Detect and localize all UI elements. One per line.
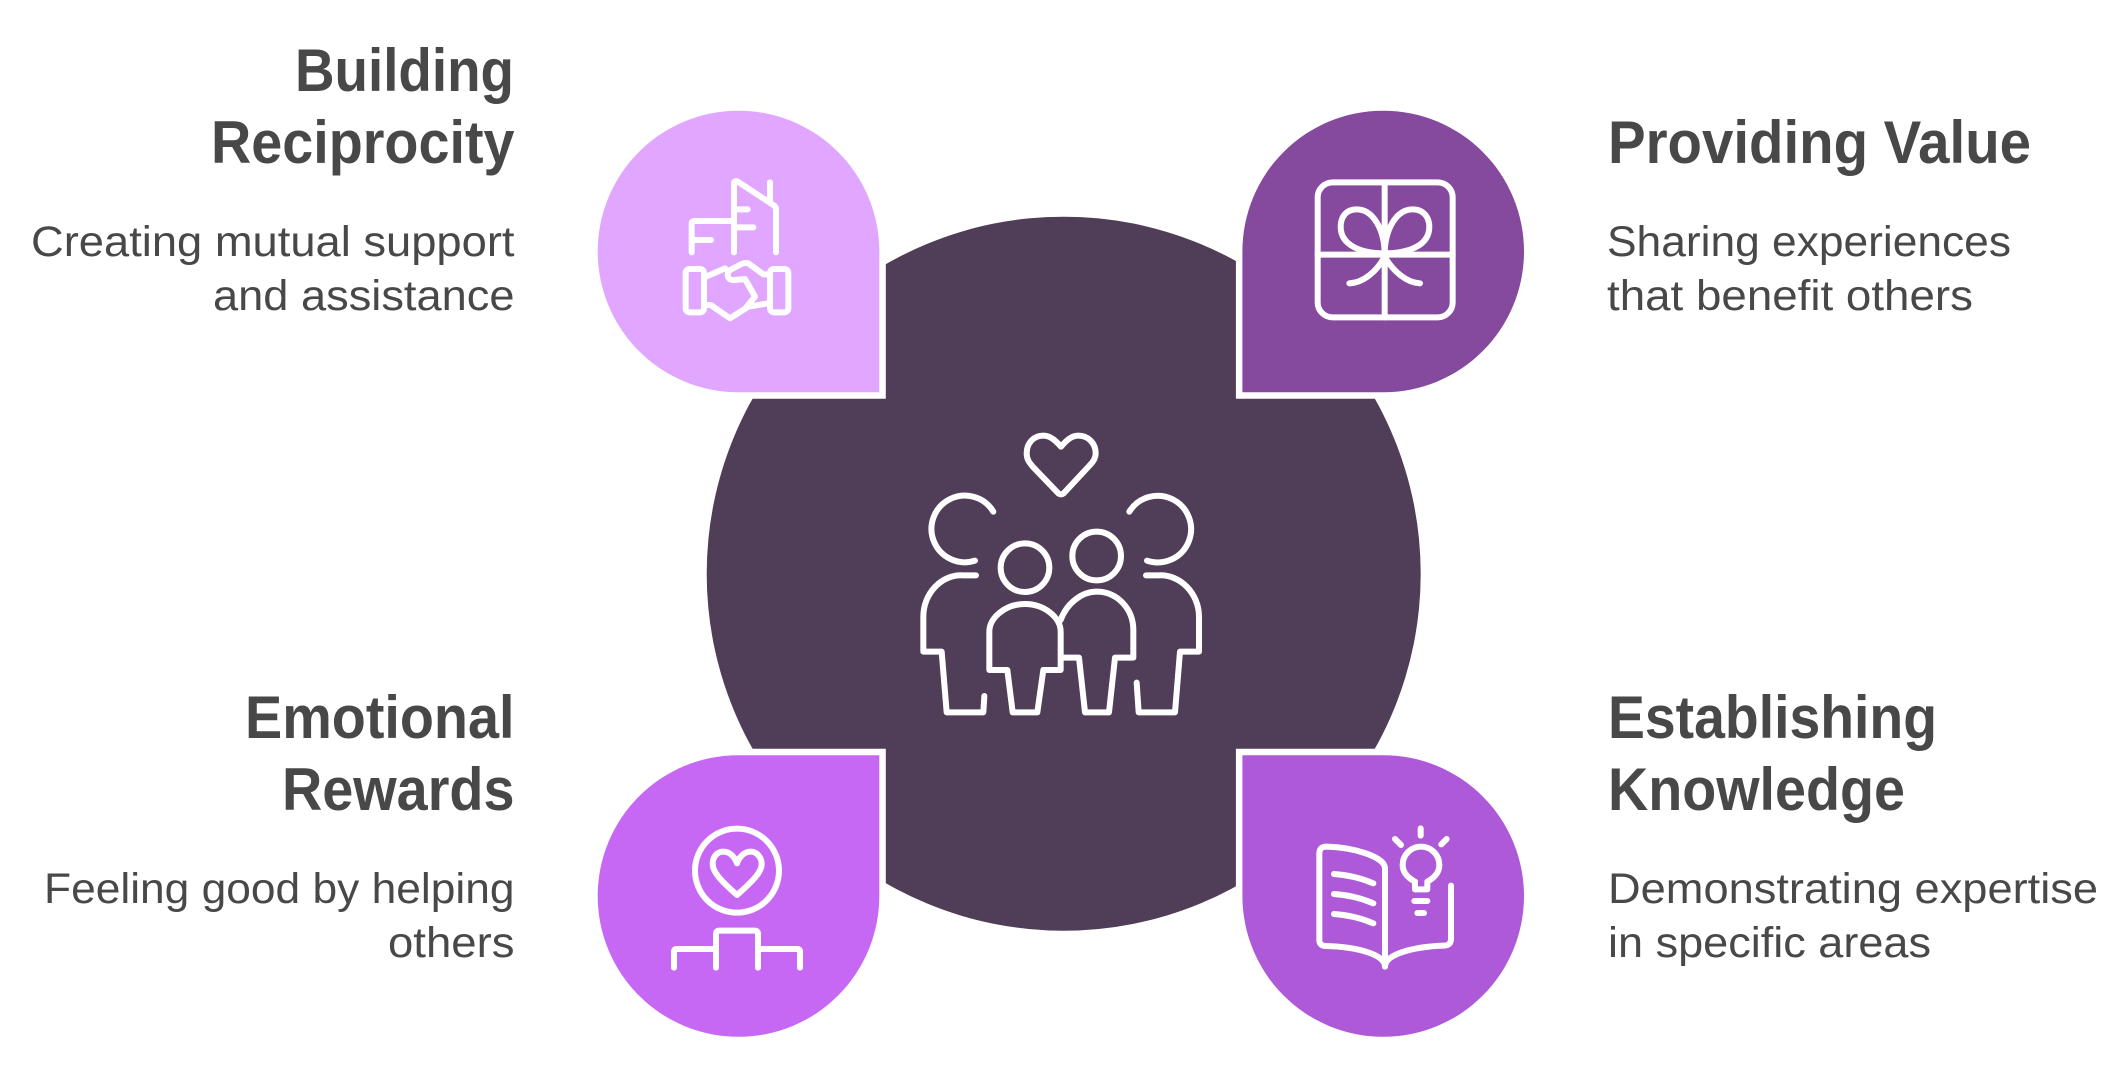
text block: establishing knowledge: Knowledge — [1608, 756, 1905, 823]
text block: emotional rewards: others — [388, 919, 514, 967]
text block: emotional rewards: Emotional — [245, 684, 514, 751]
text block: providing value: that benefit others — [1607, 272, 1973, 320]
text block: emotional rewards: Feeling good by helping — [44, 865, 514, 913]
icon: family with heart — [923, 436, 1199, 712]
panel: establishing knowledge petal — [1242, 755, 1524, 1037]
panel: building reciprocity petal — [598, 111, 879, 392]
text block: emotional rewards: Rewards — [282, 756, 514, 823]
text block: providing value: Sharing experiences — [1607, 218, 2011, 266]
text block: emotional rewards — [44, 684, 514, 967]
icon: heart medal on podium — [674, 829, 800, 968]
text block: establishing knowledge: Demonstrating expertise — [1608, 865, 2098, 913]
text block: providing value: Providing Value — [1608, 109, 2031, 176]
text block: building reciprocity: Creating mutual support — [31, 218, 515, 266]
text block: building reciprocity: Building — [295, 37, 514, 104]
text block: building reciprocity — [31, 37, 515, 320]
panel: emotional rewards petal — [598, 755, 879, 1037]
text block: providing value — [1607, 109, 2031, 320]
text block: establishing knowledge: Establishing — [1608, 684, 1937, 751]
icon: buildings and handshake — [686, 181, 788, 318]
text block: building reciprocity: Reciprocity — [211, 109, 515, 176]
icon: open book and light bulb — [1319, 828, 1451, 967]
panel: providing value petal — [1242, 111, 1524, 392]
central circle — [707, 217, 1421, 931]
text block: establishing knowledge — [1608, 684, 2098, 967]
text block: establishing knowledge: in specific areas — [1608, 919, 1931, 967]
text block: building reciprocity: and assistance — [213, 272, 514, 320]
icon: gift box — [1318, 182, 1453, 317]
